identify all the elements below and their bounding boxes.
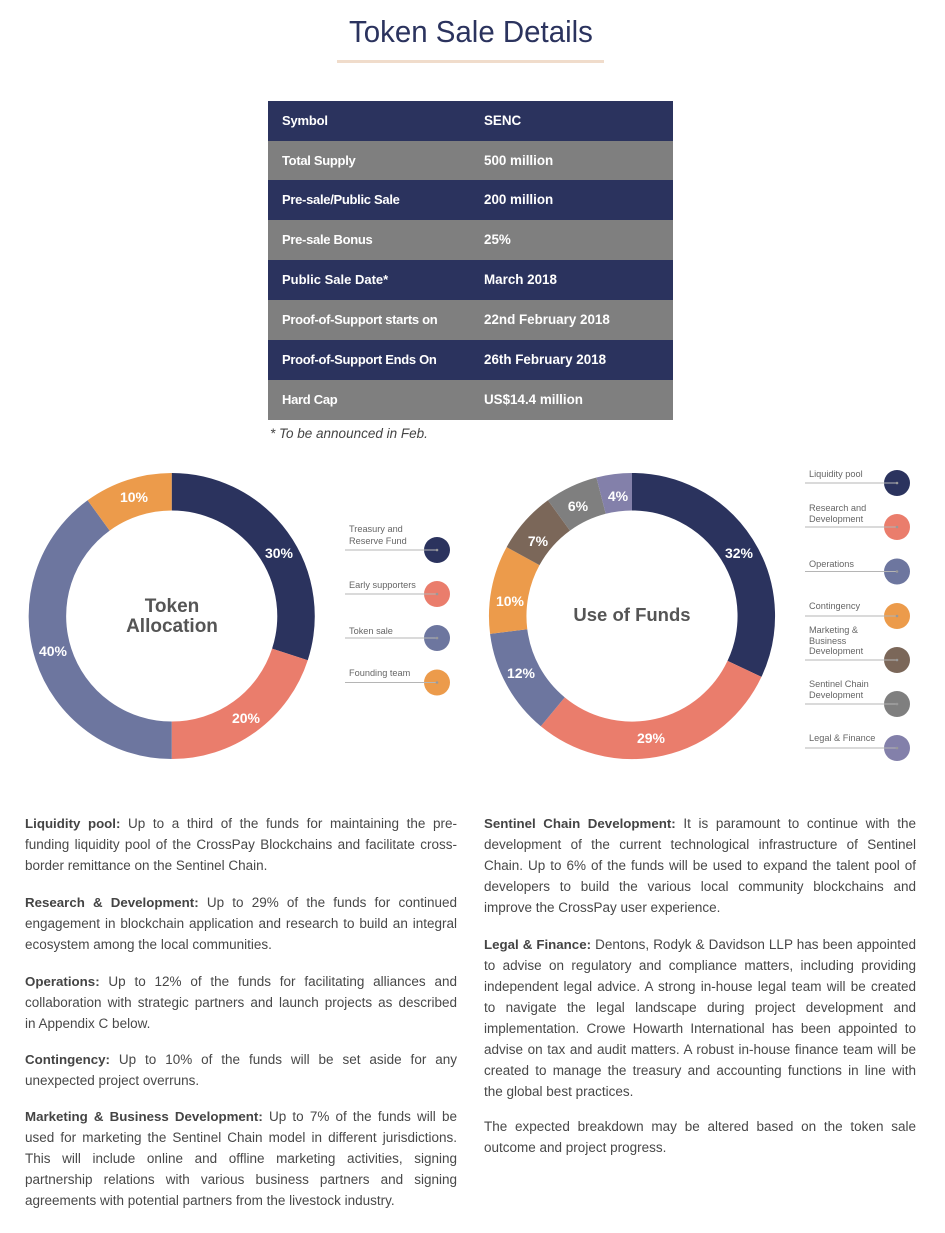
paragraph: legal and finance: the global best practices. (484, 1084, 633, 1099)
paragraph: legal and finance: created to manage the treasury and accounting functions in line with (484, 1063, 916, 1078)
donut chart: use of funds: 6% (568, 498, 589, 514)
row: total supply: 500 million (484, 153, 553, 168)
paragraph: legal and finance: Legal & Finance: Dentons, Rodyk & Davidson LLP has been appointed (484, 937, 916, 952)
paragraph: sentinel chain development: Sentinel Chain Development: It is paramount to continue with the (484, 816, 916, 831)
legend item: token sale: Token sale (349, 626, 393, 636)
row: symbol: Symbol (282, 113, 328, 128)
paragraph: sentinel chain development: development of the current technological infrastructure of Sentinel (484, 837, 916, 852)
paragraph: liquidity pool: funding liquidity pool of the CrossPay Blockchains and facilitate cross- (25, 837, 457, 852)
donut chart: use of funds: Use of Funds (573, 604, 691, 625)
paragraph: research and development (25, 895, 457, 952)
row: pre-sale/public sale: 200 million (484, 192, 553, 207)
legend item: sentinel chain development (805, 679, 910, 717)
legend item: contingency: Contingency (809, 601, 860, 611)
donut chart: token allocation: 30% (265, 545, 294, 561)
row: pre-sale bonus (268, 220, 673, 260)
legend item: early supporters: Early supporters (349, 580, 416, 590)
paragraph: marketing and business development: used for marketing the Sentinel Chain model in different jurisdictions. (25, 1130, 457, 1145)
paragraph: research and development: ecosystem among the local communities. (25, 937, 272, 952)
legend item: operations: Operations (809, 559, 854, 569)
row: proof-of-support start: Proof-of-Support starts on (282, 312, 437, 327)
paragraph: research and development: engagement in blockchain application and research to build an integral (25, 916, 457, 931)
paragraph: marketing and business development: partnership relations with various business partners and signing (25, 1172, 457, 1187)
row: public sale date: Public Sale Date* (282, 272, 388, 287)
legend: use of funds (805, 469, 910, 761)
legend item: sentinel chain development: Development (809, 690, 864, 700)
donut chart: token allocation: Allocation (126, 616, 218, 637)
row: pre-sale bonus: Pre-sale Bonus (282, 232, 372, 247)
paragraph: closing note: The expected breakdown may be altered based on the token sale (484, 1119, 916, 1134)
donut chart: use of funds: 10% (496, 593, 525, 609)
donut chart: use of funds: 32% (725, 545, 754, 561)
row: hard cap: US$14.4 million (484, 392, 583, 407)
paragraph: liquidity pool: Liquidity pool: Up to a third of the funds for maintaining the pre- (25, 816, 457, 831)
row: proof-of-support start (268, 300, 673, 340)
legend item: research and development: Development (809, 514, 864, 524)
donut chart: use of funds: 4% (608, 488, 629, 504)
paragraph: marketing and business development: Marketing & Business Development: Up to 7% of the funds will be (25, 1109, 457, 1124)
row: pre-sale/public sale (268, 180, 673, 220)
row: proof-of-support end: 26th February 2018 (484, 352, 606, 367)
legend item: marketing and business development: Marketing & (809, 625, 858, 635)
legend item: operations (805, 558, 910, 584)
donut chart: use of funds: 7% (528, 533, 549, 549)
paragraph: contingency (25, 1052, 457, 1088)
paragraph: legal and finance (484, 937, 916, 1099)
title: Token Sale Details (349, 14, 593, 49)
donut chart: use of funds: 12% (507, 665, 536, 681)
row: total supply: Total Supply (282, 153, 355, 168)
paragraph: closing note: outcome and project progress. (484, 1140, 666, 1155)
paragraph: operations (25, 974, 457, 1031)
paragraph: legal and finance: independent legal advice. A strong in-house legal team will be created (484, 979, 916, 994)
donut chart: use of funds: 29% (637, 730, 666, 746)
paragraph: operations: Operations: Up to 12% of the funds for facilitating alliances and (25, 974, 457, 989)
paragraph: marketing and business development (25, 1109, 457, 1208)
donut chart: use of funds (496, 488, 756, 746)
paragraph: liquidity pool (25, 816, 457, 873)
row: symbol (268, 101, 673, 141)
donut chart: token allocation: 10% (120, 489, 149, 505)
legend item: marketing and business development: Business (809, 636, 847, 646)
row: pre-sale/public sale: Pre-sale/Public Sale (282, 192, 400, 207)
right text column (484, 816, 916, 1155)
legend item: research and development (805, 503, 910, 540)
legend item: founding team (345, 668, 450, 696)
legend item: research and development: Research and (809, 503, 866, 513)
paragraph: contingency: unexpected project overruns. (25, 1073, 199, 1088)
paragraph: operations: collaboration with strategic partners and launch projects as described (25, 995, 457, 1010)
legend item: legal and finance (805, 733, 910, 761)
legend item: treasury and reserve fund: Reserve Fund (349, 536, 407, 546)
legend item: marketing and business development: Development (809, 646, 864, 656)
legend item: marketing and business development (805, 625, 910, 673)
row: symbol: SENC (484, 113, 521, 128)
row: proof-of-support end (268, 340, 673, 380)
paragraph: marketing and business development: This will include online and offline marketing activities, signing (25, 1151, 457, 1166)
paragraph: legal and finance: to advise on regulatory and compliance matters, including providing (484, 958, 916, 973)
paragraph: closing note (484, 1119, 916, 1155)
paragraph: sentinel chain development (484, 816, 916, 915)
legend item: liquidity pool: Liquidity pool (809, 469, 863, 479)
paragraph: sentinel chain development: improve the CrossPay user experience. (484, 900, 720, 915)
row: proof-of-support start: 22nd February 2018 (484, 312, 610, 327)
legend item: legal and finance: Legal & Finance (809, 733, 875, 743)
paragraph: sentinel chain development: developers to build the various local community blockchains and (484, 879, 916, 894)
row: hard cap (268, 380, 673, 420)
paragraph: contingency: Contingency: Up to 10% of the funds will be set aside for any (25, 1052, 457, 1067)
paragraph: legal and finance: advise on tax and audit matters. A robust in-house finance team will be (484, 1042, 916, 1057)
row: public sale date (268, 260, 673, 300)
row: pre-sale bonus: 25% (484, 232, 511, 247)
legend item: contingency (805, 601, 910, 629)
donut chart: token allocation: Token (145, 596, 199, 617)
paragraph: legal and finance: to navigate the legal landscape during project development and (484, 1000, 916, 1015)
donut chart: token allocation: 40% (39, 643, 68, 659)
token details table (268, 101, 673, 420)
paragraph: research and development: Research & Development: Up to 29% of the funds for continued (25, 895, 457, 910)
legend item: liquidity pool (805, 469, 910, 496)
paragraph: legal and finance: implementation. Crowe Howarth International has been appointed to (484, 1021, 916, 1036)
row: proof-of-support end: Proof-of-Support Ends On (282, 352, 437, 367)
paragraph: liquidity pool: border remittance on the Sentinel Chain. (25, 858, 267, 873)
table footnote: * To be announced in Feb. (270, 426, 428, 441)
left text column (25, 816, 457, 1208)
donut chart: token allocation: 20% (232, 710, 261, 726)
legend item: token sale (345, 625, 450, 651)
row: total supply (268, 141, 673, 180)
legend item: treasury and reserve fund (345, 524, 450, 563)
legend: token allocation (345, 524, 450, 696)
paragraph: operations: in Appendix C below. (25, 1016, 150, 1031)
paragraph: marketing and business development: agreements with potential partners from the livestock industry. (25, 1193, 395, 1208)
legend item: sentinel chain development: Sentinel Chain (809, 679, 869, 689)
donut chart: token allocation (39, 489, 296, 740)
legend item: treasury and reserve fund: Treasury and (349, 524, 403, 534)
row: hard cap: Hard Cap (282, 392, 337, 407)
paragraph: sentinel chain development: Chain. Up to 6% of the funds will be used to expand the talent pool of (484, 858, 916, 873)
row: public sale date: March 2018 (484, 272, 557, 287)
legend item: founding team: Founding team (349, 668, 411, 678)
legend item: early supporters (345, 580, 450, 607)
